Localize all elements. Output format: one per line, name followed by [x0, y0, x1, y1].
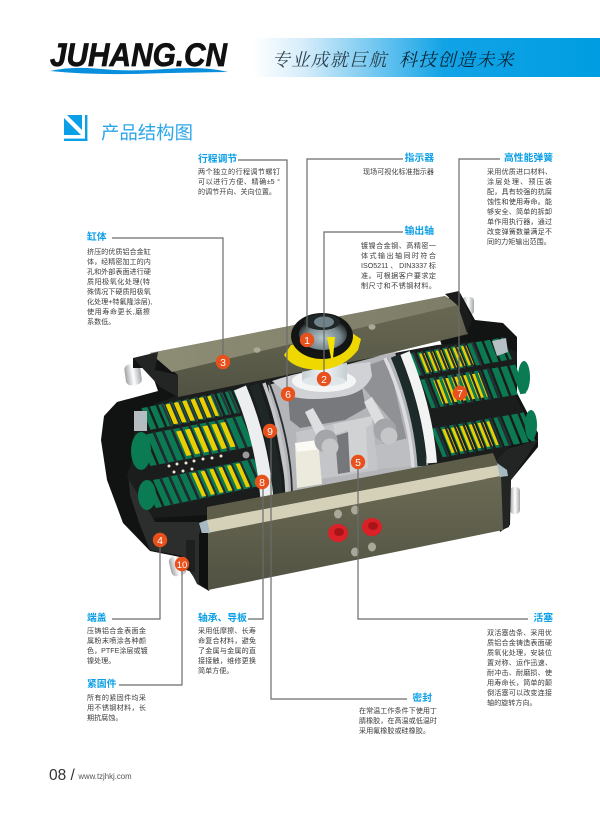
- callout: seal: 采用氟橡胶或硅橡胶。: [359, 727, 430, 735]
- callout: piston: [487, 612, 553, 707]
- numbered markers: [153, 333, 467, 571]
- callout: cylinder body: 挤压的优质铝合金缸: [87, 248, 151, 256]
- callout: cylinder body: 质阳极氧化处理(特: [87, 278, 150, 286]
- marker 7: [453, 386, 467, 400]
- callout: output shaft: [361, 226, 436, 290]
- marker 3: [216, 355, 230, 369]
- interior chamber: [127, 340, 530, 518]
- right piston discs: [405, 353, 432, 463]
- callout: piston: 质氧化处理，安装位: [487, 649, 552, 657]
- right end cap: [440, 291, 538, 532]
- callout: high performance spring: 同的力矩输出范围。: [487, 238, 551, 246]
- callout: piston: 双活塞齿条、采用优: [487, 629, 552, 637]
- callout: bearings and guide: 接接触，维修更换: [198, 657, 256, 665]
- callout: piston: 轴的旋转方向。: [487, 699, 537, 707]
- callout: cylinder body: 系数低。: [87, 318, 115, 326]
- callout: bearings and guide: 简单方便。: [198, 667, 233, 675]
- callout: end cap: 属粉末喷涂各种颜: [87, 637, 146, 645]
- leader lines: [112, 159, 528, 699]
- callout: end cap: 色，PTFE涂层或镀: [87, 647, 148, 655]
- callout: output shaft: 镀镍合金钢、高精密一: [361, 242, 436, 250]
- marker 10: [175, 557, 189, 571]
- callout: cylinder body: 殊情况下硬质阳极氧: [87, 288, 151, 296]
- rack and pinion: [288, 388, 366, 428]
- marker 2: 2: [321, 374, 327, 386]
- callout: piston: 用寿命长，简单的颠: [487, 679, 552, 687]
- marker 1: [300, 333, 314, 347]
- right lower bolt: [510, 487, 520, 514]
- marker 3: 3: [220, 357, 226, 369]
- marker 8: [255, 475, 269, 489]
- callout: stroke adjustment: [198, 154, 280, 196]
- right spring ends: [518, 361, 530, 393]
- callout: seal: [359, 692, 437, 735]
- right rear bolt: [462, 297, 474, 315]
- callout: end cap: 端盖: [87, 613, 107, 624]
- callout: cylinder body: [87, 231, 152, 326]
- marker 7: 7: [457, 388, 463, 400]
- callout: high performance spring: [487, 152, 553, 246]
- callout: bearings and guide: 采用低摩擦、长寿: [198, 627, 256, 635]
- callout: high performance spring: 单作用执行器，通过: [487, 218, 552, 226]
- callout: piston: 置对称、运作迅速、: [487, 659, 552, 667]
- callout: end cap: 压铸铝合金表面金: [87, 627, 146, 635]
- left piston discs: [240, 388, 267, 499]
- callout: fasteners: 期抗腐蚀。: [87, 714, 122, 722]
- indicator dome: [291, 313, 353, 359]
- icon: section marker: [64, 115, 87, 141]
- yellow indicator base: [284, 333, 361, 370]
- callout: seal: 腈橡胶，在高温或低温时: [359, 717, 437, 725]
- left center dots: [168, 452, 250, 474]
- callout: stroke adjustment: 行程调节: [198, 154, 237, 165]
- marker 4: [153, 533, 167, 547]
- marker 10: 10: [177, 560, 187, 571]
- callout: output shaft: 准。可根据客户要求定: [361, 272, 436, 280]
- actuator illustration: [101, 291, 538, 591]
- callout: end cap: [87, 612, 148, 665]
- callout: cylinder body: 使用寿命更长,磨擦: [87, 308, 150, 316]
- marker 9: 9: [267, 426, 273, 438]
- callout: high performance spring: 够安全、简单的拆卸: [487, 208, 552, 216]
- callout: high performance spring: 改变弹簧数量满足不: [487, 228, 552, 236]
- callout: output shaft: 体式输出轴同时符合: [361, 252, 436, 260]
- callout: bearings and guide: [198, 612, 256, 675]
- gear plate: [272, 362, 372, 399]
- callout: output shaft: 输出轴: [405, 226, 434, 237]
- callout: output shaft: 制尺寸和不锈钢材料。: [361, 282, 436, 290]
- marker 6: 6: [285, 389, 291, 401]
- callout: fasteners: 用不锈钢材料，长: [87, 704, 146, 712]
- marker 9: [263, 424, 277, 438]
- slogan band: 科技创造未来: [399, 46, 515, 72]
- callout: piston: 倒活塞可以改变连接: [487, 689, 552, 697]
- section title: 产品结构图: [101, 119, 193, 145]
- callout: piston: 活塞: [533, 613, 553, 624]
- left rear bolt: [124, 363, 142, 386]
- marker 4: 4: [157, 535, 163, 547]
- slogan band: 专业成就巨航: [272, 46, 389, 72]
- lower bar: [207, 453, 498, 520]
- marker 5: 5: [355, 457, 361, 469]
- center cavity: [268, 352, 428, 497]
- callout: fasteners: 紧固件: [87, 679, 116, 690]
- callout: stroke adjustment: 可以进行方便、精确±5 °: [198, 178, 280, 186]
- callout: cylinder body: 缸体: [87, 232, 107, 243]
- callout: bearings and guide: 轴承、导板: [198, 613, 247, 624]
- lower left bolt: [168, 554, 187, 577]
- callout: fasteners: 所有的紧固件均采: [87, 694, 146, 702]
- right springs: [413, 348, 508, 365]
- callout: bearings and guide: 命复合材料，避免: [198, 637, 256, 645]
- page number and url: 08 / www.tzjhkj.com: [49, 767, 132, 784]
- top bar: [150, 296, 468, 397]
- mounting holes: [334, 506, 376, 556]
- marker 2: [317, 372, 331, 386]
- marker 1: 1: [304, 335, 310, 347]
- callout: fasteners: [87, 678, 146, 722]
- marker 5: [351, 455, 365, 469]
- callout: cylinder body: 孔和外部表面进行硬: [87, 268, 151, 276]
- callout: piston: 质铝合金铸造表面硬: [487, 639, 552, 647]
- callout: indicator: 指示器: [405, 153, 434, 164]
- logo: JUHANG.CN: [50, 37, 228, 73]
- left spring ends: [131, 432, 151, 470]
- callout: end cap: 镍处理。: [87, 657, 115, 665]
- callout: cylinder body: 体，经精密加工的内: [87, 258, 151, 266]
- left end cap: [101, 358, 225, 591]
- callout: indicator: [363, 152, 434, 176]
- callout: stroke adjustment: 两个独立的行程调节螺钉: [198, 168, 280, 176]
- callout: indicator: 现场可视化标准指示器: [363, 168, 434, 176]
- callout: output shaft: ISO5211、DIN3337标: [361, 262, 436, 270]
- callout: high performance spring: 采用优质进口材料、: [487, 168, 552, 176]
- slogan band: [253, 38, 600, 77]
- marker 6: [281, 387, 295, 401]
- callout: high performance spring: 涂层处理、预压装: [487, 178, 552, 186]
- callout: piston: 耐冲击、耐磨损、使: [487, 669, 552, 677]
- left springs: [146, 401, 240, 419]
- callout: high performance spring: 蚀性和使用寿命。能: [487, 198, 552, 206]
- callout: bearings and guide: 了金属与金属的直: [198, 647, 256, 655]
- marker 8: 8: [259, 477, 265, 489]
- callout: high performance spring: 高性能弹簧: [504, 153, 553, 164]
- red ports: [328, 524, 348, 542]
- callout: high performance spring: 配，具有较强的抗腐: [487, 188, 552, 196]
- callout: stroke adjustment: 的调节开向、关向位置。: [198, 188, 276, 196]
- bolts in center: [305, 408, 330, 443]
- callout: seal: 密封: [412, 693, 432, 704]
- callout: seal: 在常温工作条件下使用丁: [359, 707, 437, 715]
- callout: cylinder body: 化处理+特氟隆涂层),: [87, 298, 152, 306]
